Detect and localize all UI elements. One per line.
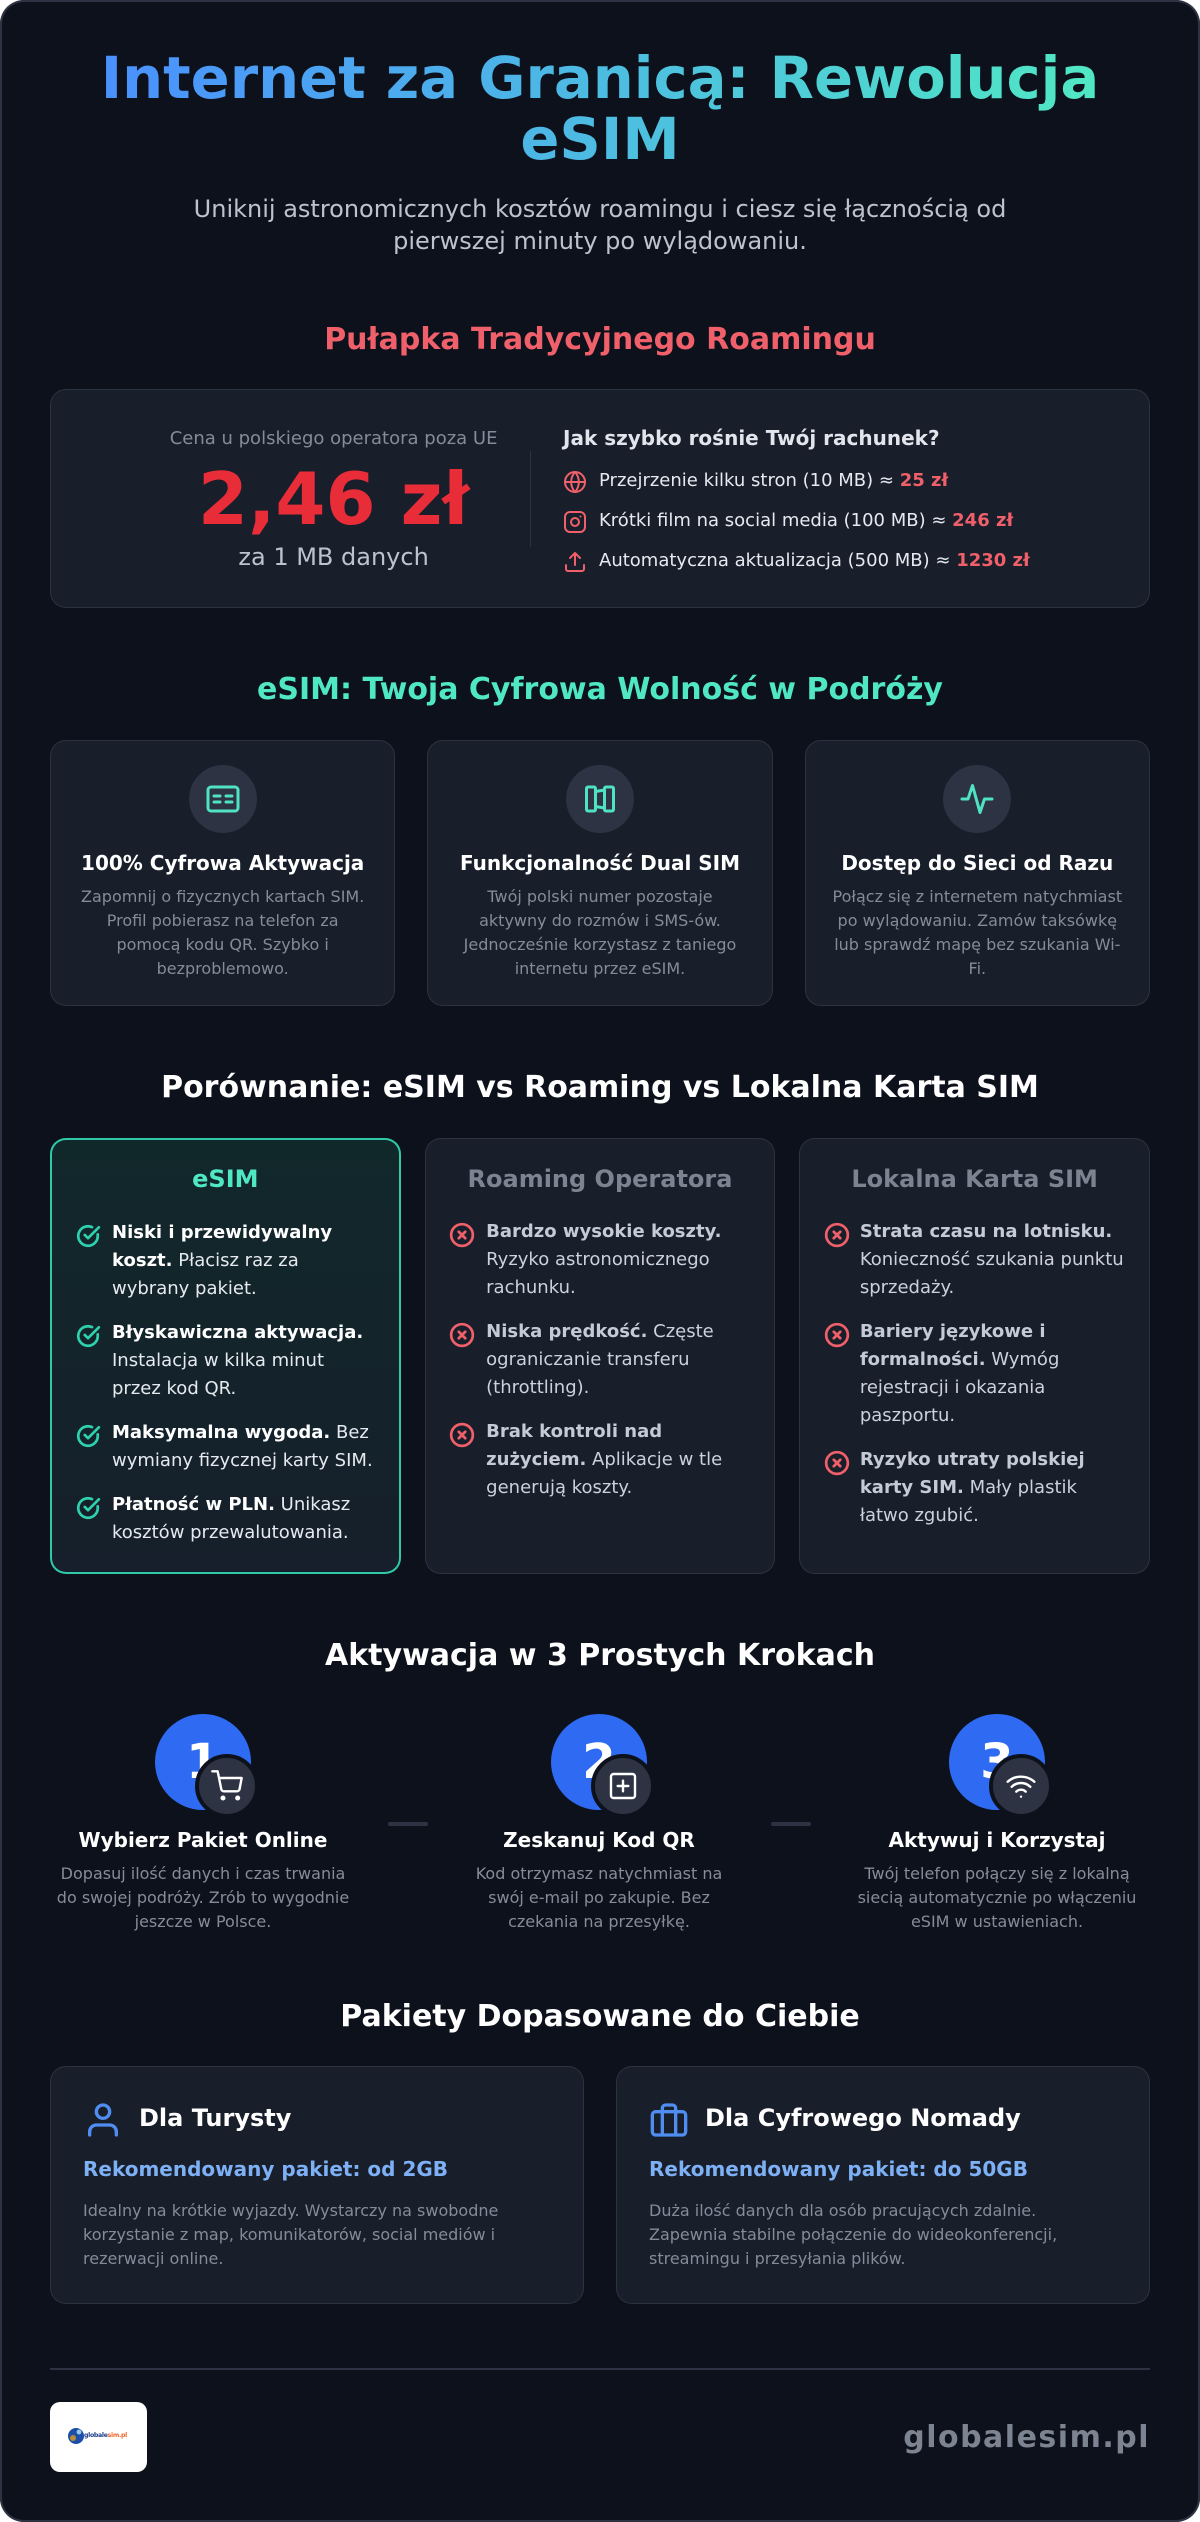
feature description: pomocą kodu QR. Szybko i (116, 935, 329, 954)
item: losing sim: karty SIM. Mały plastik (860, 1477, 1077, 1498)
item: language barriers: paszportu. (860, 1405, 955, 1426)
step 3 (858, 1714, 1136, 1931)
panel: roaming column (425, 1138, 775, 1574)
feature description: Zapomnij o fizycznych kartach SIM. (81, 887, 364, 906)
panel: tourist package (50, 2066, 584, 2304)
item: high cost: Bardzo wysokie koszty. (486, 1221, 722, 1242)
feature description: lub sprawdź mapę bez szukania Wi- (834, 935, 1120, 954)
connector (388, 1822, 428, 1826)
item: convenience (76, 1422, 373, 1471)
item: losing sim: łatwo zgubić. (860, 1505, 979, 1526)
item: fast activation: Instalacja w kilka minut (112, 1350, 324, 1371)
feature title: 100% Cyfrowa Aktywacja (81, 850, 364, 874)
bill growth heading: Jak szybko rośnie Twój rachunek? (563, 426, 940, 450)
icon: sim card (189, 765, 257, 833)
icon: globe (68, 2428, 84, 2444)
number 1 (155, 1714, 251, 1810)
icon: briefcase (650, 2103, 688, 2137)
feature description: aktywny do rozmów i SMS-ów. (479, 911, 721, 930)
feature description (462, 887, 736, 978)
step description (57, 1864, 349, 1931)
item: fast activation (76, 1322, 363, 1399)
icon: dual sim (566, 765, 634, 833)
item: PLN payment (76, 1494, 350, 1543)
item: low speed: (throttling). (486, 1377, 589, 1398)
cost row: automatic update: Automatyczna aktualizacja (500 MB) ≈ 1230 zł (599, 550, 1030, 571)
item: low cost (76, 1222, 332, 1299)
icon: qr scan (591, 1754, 655, 1818)
feature description: po wylądowaniu. Zamów taksówkę (838, 911, 1117, 930)
item: no control: Brak kontroli nad (486, 1421, 662, 1442)
feature description: internetu przez eSIM. (515, 959, 685, 978)
feature title: Funkcjonalność Dual SIM (460, 850, 740, 874)
panel: nomad package (616, 2066, 1150, 2304)
item: lost time: Strata czasu na lotnisku. (860, 1221, 1112, 1242)
package title: Dla Cyfrowego Nomady (705, 2104, 1021, 2132)
package description: rezerwacji online. (83, 2249, 223, 2268)
package title: Dla Turysty (139, 2104, 291, 2132)
title: Internet za Granicą: Rewolucja (101, 45, 1099, 112)
subtitle (194, 195, 1006, 255)
column title: Lokalna Karta SIM (851, 1165, 1098, 1193)
panel: local sim column (799, 1138, 1150, 1574)
item: low speed: ograniczanie transferu (486, 1349, 690, 1370)
item: fast activation: Błyskawiczna aktywacja. (112, 1322, 363, 1343)
item: low cost: Niski i przewidywalny (112, 1222, 332, 1243)
package description: Duża ilość danych dla osób pracujących zdalnie. (649, 2201, 1036, 2220)
feature description: Jednocześnie korzystasz z taniego (464, 935, 736, 954)
step description: Dopasuj ilość danych i czas trwania (61, 1864, 345, 1883)
package description: streamingu i przesyłania plików. (649, 2249, 905, 2268)
item: lost time (824, 1221, 1124, 1298)
item: language barriers (824, 1321, 1059, 1426)
step description: Kod otrzymasz natychmiast na (476, 1864, 722, 1883)
step title: Zeskanuj Kod QR (503, 1828, 695, 1852)
item: low cost: koszt. Płacisz raz za (112, 1250, 299, 1271)
footer logo (50, 2402, 147, 2472)
step 2 (476, 1714, 722, 1931)
package description: Idealny na krótkie wyjazdy. Wystarczy na swobodne (83, 2201, 498, 2220)
footer site name: globalesim.pl (903, 2420, 1150, 2454)
step description: siecią automatycznie po włączeniu (858, 1888, 1136, 1907)
item: high cost (450, 1221, 722, 1298)
item: no control: generują koszty. (486, 1477, 632, 1498)
step description (476, 1864, 722, 1931)
step title: Wybierz Pakiet Online (79, 1828, 327, 1852)
item: high cost: rachunku. (486, 1277, 576, 1298)
item: PLN payment: Płatność w PLN. Unikasz (112, 1494, 350, 1515)
item: language barriers: formalności. Wymóg (860, 1349, 1059, 1370)
package description: korzystanie z map, komunikatorów, social mediów i (83, 2225, 495, 2244)
item: high cost: Ryzyko astronomicznego (486, 1249, 710, 1270)
step description: czekania na przesyłkę. (508, 1912, 690, 1931)
panel: dual sim (427, 740, 773, 1006)
feature description: Twój polski numer pozostaje (487, 887, 713, 906)
item: no control (450, 1421, 722, 1498)
item: language barriers: rejestracji i okazania (860, 1377, 1045, 1398)
number 3 (949, 1714, 1045, 1810)
subtitle: pierwszej minuty po wylądowaniu. (393, 227, 807, 255)
step description (858, 1864, 1136, 1931)
item: losing sim (824, 1449, 1085, 1526)
item: no control: zużyciem. Aplikacje w tle (486, 1449, 722, 1470)
icon: person (88, 2103, 118, 2137)
feature title: Dostęp do Sieci od Razu (841, 850, 1113, 874)
package description (83, 2201, 498, 2268)
item: lost time: sprzedaży. (860, 1277, 954, 1298)
connector (770, 1822, 810, 1826)
feature description: bezproblemowo. (157, 959, 289, 978)
price unit: za 1 MB danych (238, 542, 429, 570)
title (100, 49, 1100, 170)
feature description: Połącz się z internetem natychmiast (833, 887, 1122, 906)
step description: swój e-mail po zakupie. Bez (488, 1888, 710, 1907)
number 2 (551, 1714, 647, 1810)
logo wordmark: globalesim.pl (84, 2432, 127, 2439)
panel: instant network (805, 740, 1150, 1006)
column title: Roaming Operatora (468, 1165, 732, 1193)
panel: roaming cost (50, 389, 1150, 608)
step description: jeszcze w Polsce. (135, 1912, 271, 1931)
package recommendation: Rekomendowany pakiet: do 50GB (649, 2157, 1028, 2181)
heading: roaming trap: Pułapka Tradycyjnego Roamingu (324, 322, 876, 356)
step description: do swojej podróży. Zrób to wygodnie (57, 1888, 349, 1907)
icon: cart (195, 1754, 259, 1818)
panel: esim column (50, 1138, 401, 1574)
step description: eSIM w ustawieniach. (911, 1912, 1083, 1931)
cost row: web pages: Przejrzenie kilku stron (10 MB) ≈ 25 zł (599, 470, 948, 490)
heading: packages: Pakiety Dopasowane do Ciebie (340, 1998, 860, 2034)
item: low speed (450, 1321, 714, 1398)
item: language barriers: Bariery językowe i (860, 1321, 1046, 1342)
item: convenience: wymiany fizycznej karty SIM. (112, 1450, 373, 1471)
package description (649, 2201, 1057, 2268)
package recommendation: Rekomendowany pakiet: od 2GB (83, 2157, 448, 2181)
big price: 2,46 zł (198, 456, 469, 540)
number 1: 1 (186, 1734, 220, 1790)
feature description (81, 887, 364, 978)
item: PLN payment: kosztów przewalutowania. (112, 1522, 349, 1543)
step title: Aktywuj i Korzystaj (888, 1828, 1105, 1852)
step 1 (57, 1714, 349, 1931)
number 2: 2 (582, 1734, 616, 1790)
heading: comparison: Porównanie: eSIM vs Roaming vs Lokalna Karta SIM (161, 1070, 1039, 1104)
cost row: short film: Krótki film na social media (100 MB) ≈ 246 zł (599, 510, 1013, 531)
item: losing sim: Ryzyko utraty polskiej (860, 1449, 1085, 1470)
title: eSIM (520, 106, 680, 172)
heading: activation steps: Aktywacja w 3 Prostych Krokach (325, 1638, 875, 1672)
item: fast activation: przez kod QR. (112, 1378, 236, 1399)
package description: Zapewnia stabilne połączenie do wideokonferencji, (649, 2225, 1057, 2244)
column title: eSIM (192, 1165, 259, 1193)
subtitle: Uniknij astronomicznych kosztów roamingu i ciesz się łącznością od (194, 195, 1006, 223)
icon: activity pulse (943, 765, 1011, 833)
feature description: Profil pobierasz na telefon za (107, 911, 339, 930)
item: convenience: Maksymalna wygoda. Bez (112, 1422, 369, 1443)
step description: Twój telefon połączy się z lokalną (864, 1864, 1130, 1883)
heading: esim freedom: eSIM: Twoja Cyfrowa Wolność w Podróży (257, 672, 943, 706)
number 3: 3 (980, 1734, 1014, 1790)
feature description: Fi. (969, 959, 986, 978)
panel: digital activation (50, 740, 395, 1006)
price label: Cena u polskiego operatora poza UE (170, 428, 497, 449)
feature description (833, 887, 1122, 978)
icon: wifi (989, 1754, 1053, 1818)
item: lost time: Konieczność szukania punktu (860, 1249, 1124, 1270)
item: low speed: Niska prędkość. Częste (486, 1321, 714, 1342)
item: low cost: wybrany pakiet. (112, 1278, 257, 1299)
